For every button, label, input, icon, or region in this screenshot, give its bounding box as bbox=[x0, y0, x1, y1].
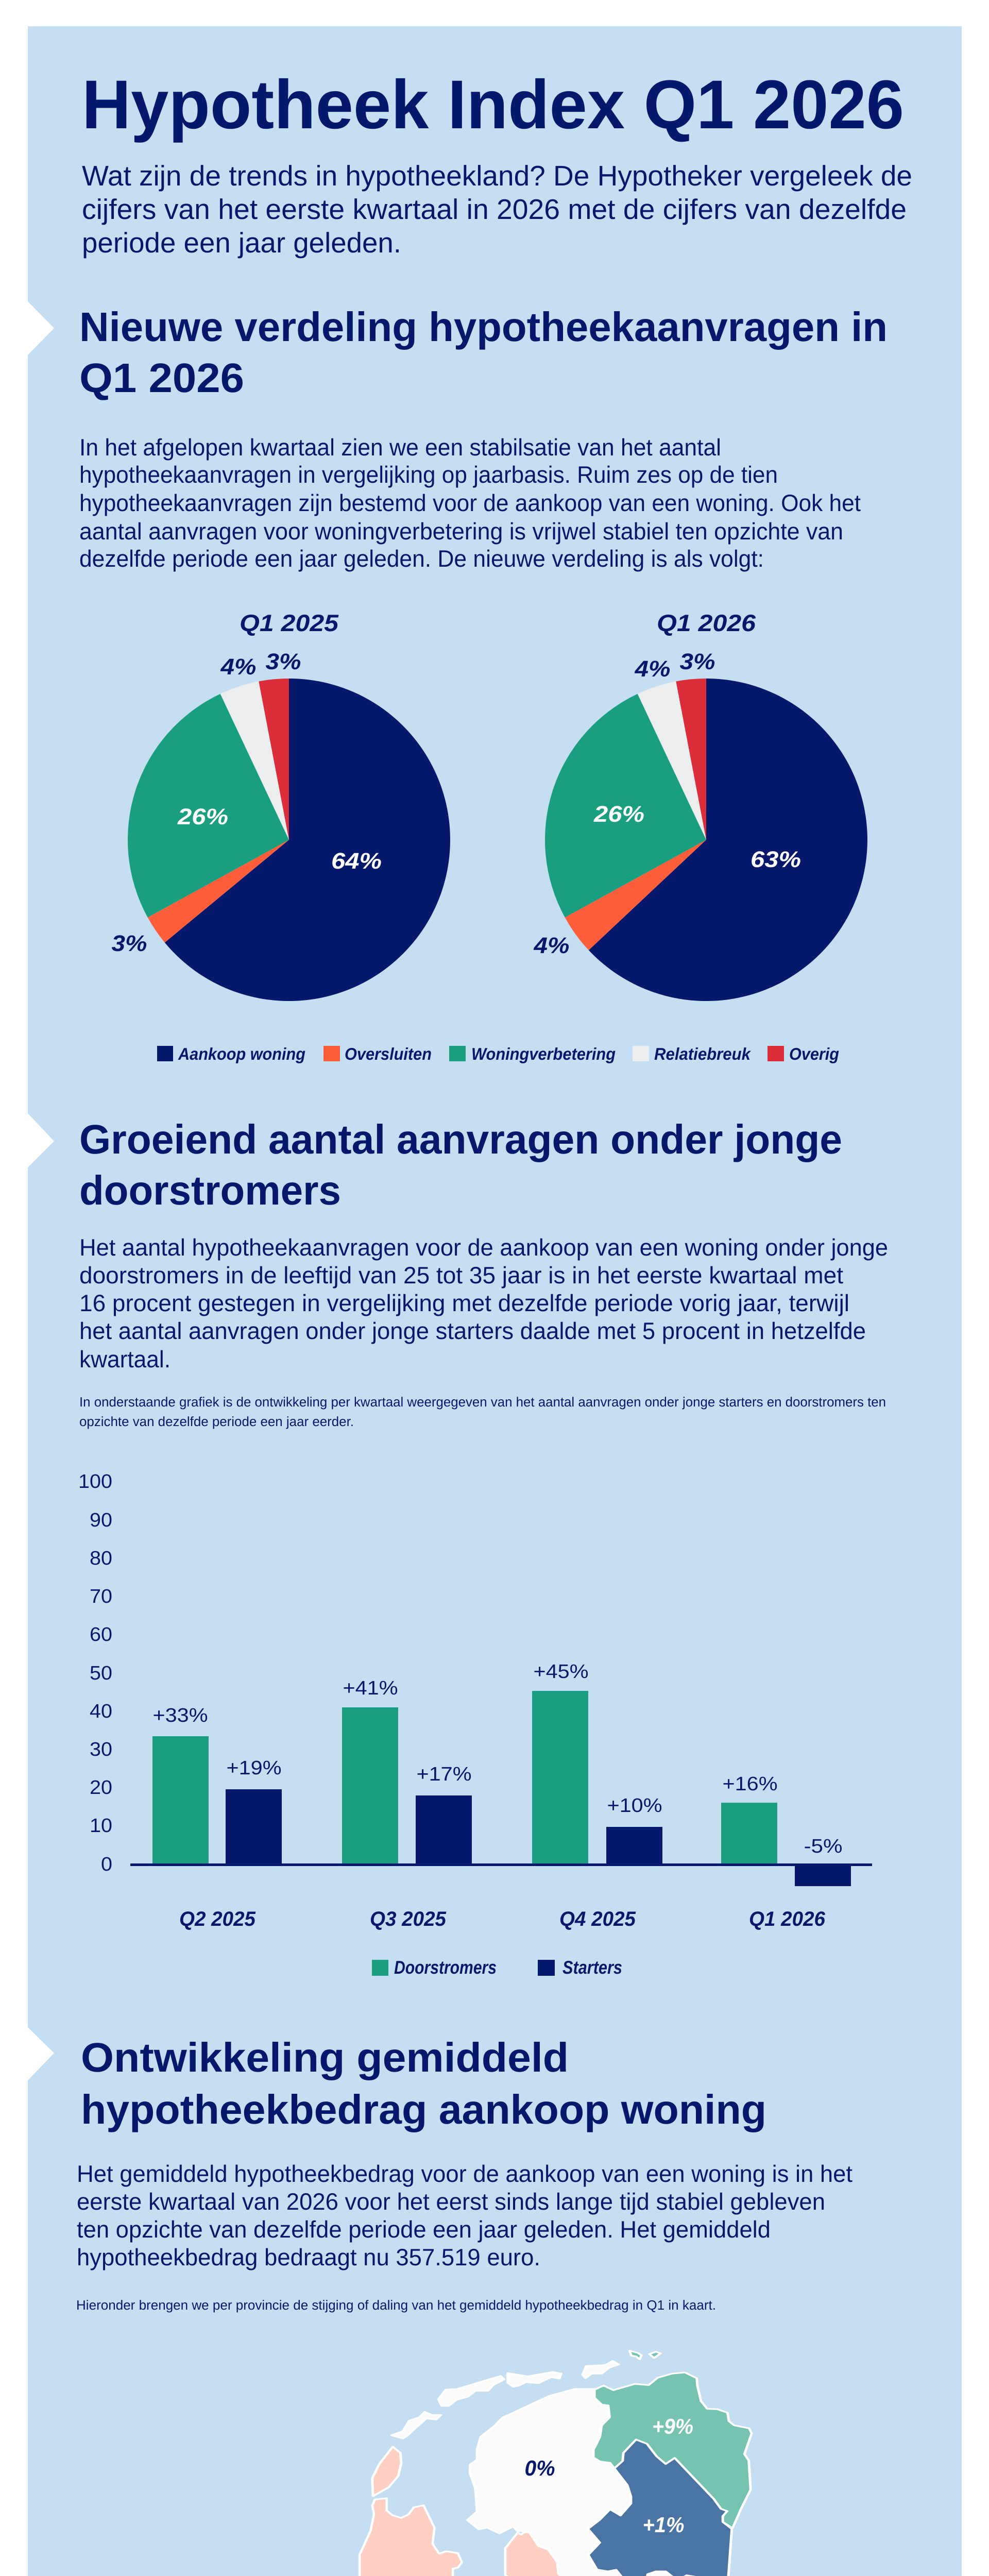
pie chart: Q1 2025: 64% bbox=[331, 849, 382, 874]
pie legend: Relatiebreuk bbox=[654, 1044, 752, 1063]
text block: section 1: In het afgelopen kwartaal zien we een stabilsatie van het aantal bbox=[79, 434, 721, 461]
bars bbox=[130, 1691, 872, 1886]
intro text: Wat zijn de trends in hypotheekland? De Hypotheker vergeleek de bbox=[82, 160, 912, 192]
map value labels: +9% bbox=[652, 2414, 693, 2438]
y axis labels bbox=[78, 1471, 112, 1875]
intro text: periode een jaar geleden. bbox=[82, 227, 401, 259]
bar chart bbox=[78, 1471, 872, 1930]
pie legend: Oversluiten bbox=[345, 1044, 432, 1063]
small note: section 2 bbox=[79, 1394, 886, 1429]
y axis labels: 50 bbox=[90, 1663, 112, 1684]
text block: section 3 bbox=[77, 2160, 852, 2270]
pie chart: Q1 2026: 26% bbox=[593, 802, 644, 827]
bar value labels: -5% bbox=[804, 1836, 843, 1857]
map value labels: 0% bbox=[524, 2456, 555, 2480]
text block: section 1: hypotheekaanvragen in vergelijking op jaarbasis. Ruim zes op de tien bbox=[79, 461, 778, 488]
bar value labels bbox=[152, 1661, 843, 1857]
y axis labels: 10 bbox=[90, 1815, 112, 1837]
text block: section 3: eerste kwartaal van 2026 voor het eerst sinds lange tijd stabiel gebleven bbox=[77, 2188, 825, 2215]
heading: section 3: Ontwikkeling gemiddeld bbox=[81, 2035, 569, 2080]
heading: section 3 bbox=[81, 2035, 766, 2132]
x axis labels: Q3 2025 bbox=[370, 1908, 447, 1930]
text block: section 3: hypotheekbedrag bedraagt nu 357.519 euro. bbox=[77, 2244, 540, 2270]
y axis labels: 100 bbox=[78, 1471, 112, 1493]
x axis labels: Q2 2025 bbox=[179, 1908, 256, 1930]
title: Hypotheek Index Q1 2026 bbox=[82, 66, 904, 143]
pie legend: Aankoop woning bbox=[178, 1044, 305, 1063]
y axis labels: 0 bbox=[101, 1854, 112, 1875]
text block: section 2: Het aantal hypotheekaanvragen voor de aankoop van een woning onder jonge bbox=[79, 1234, 888, 1261]
heading: section 2: doorstromers bbox=[79, 1167, 341, 1213]
pie chart: Q1 2025: 4% bbox=[220, 654, 257, 680]
pie chart: Q1 2025: 3% bbox=[266, 649, 301, 674]
small note: section 2: opzichte van dezelfde periode een jaar eerder. bbox=[79, 1414, 354, 1429]
bar chart legend: Starters bbox=[562, 1957, 622, 1978]
y axis labels: 40 bbox=[90, 1701, 112, 1722]
map of the Netherlands bbox=[158, 2350, 752, 2576]
text block: section 1: dezelfde periode een jaar geleden. De nieuwe verdeling is als volgt: bbox=[79, 545, 764, 572]
pie chart: Q1 2026: 63% bbox=[751, 847, 801, 872]
bar chart legend bbox=[372, 1957, 622, 1978]
text block: section 1: aantal aanvragen voor woningverbetering is vrijwel stabiel ten opzichte van bbox=[79, 518, 843, 545]
y axis labels: 70 bbox=[90, 1586, 112, 1607]
map value labels: +1% bbox=[643, 2513, 684, 2537]
bar value labels: +45% bbox=[534, 1661, 588, 1683]
provinces: middle and south bbox=[279, 2498, 700, 2576]
small note: section 2: In onderstaande grafiek is de ontwikkeling per kwartaal weergegeven van het aantal aanvragen onder jonge starters en doorstromers ten bbox=[79, 1394, 886, 1410]
small note: section 3: Hieronder brengen we per provincie de stijging of daling van het gemiddeld hypotheekbedrag in Q1 in kaart. bbox=[76, 2297, 716, 2313]
heading: section 3: hypotheekbedrag aankoop woning bbox=[81, 2087, 766, 2132]
text block: section 2: 16 procent gestegen in vergelijking met dezelfde periode vorig jaar, terwijl bbox=[79, 1290, 849, 1316]
text block: section 3: ten opzichte van dezelfde periode een jaar geleden. Het gemiddeld bbox=[77, 2216, 771, 2243]
text block: section 2 bbox=[79, 1234, 888, 1372]
x axis labels: Q4 2025 bbox=[559, 1908, 636, 1930]
pie chart: Q1 2026: 4% bbox=[533, 933, 570, 958]
pie chart: Q1 2025 bbox=[111, 609, 450, 1001]
y axis labels: 80 bbox=[90, 1548, 112, 1569]
bar value labels: +16% bbox=[722, 1773, 778, 1795]
bar value labels: +10% bbox=[607, 1795, 662, 1817]
pie chart: Q1 2026: 4% bbox=[634, 656, 671, 682]
intro text: cijfers van het eerste kwartaal in 2026 met de cijfers van dezelfde bbox=[82, 193, 907, 225]
pie legend: Woningverbetering bbox=[471, 1044, 616, 1063]
heading: section 1 bbox=[79, 304, 888, 401]
pie legend: Overig bbox=[789, 1044, 839, 1063]
text block: section 2: doorstromers in de leeftijd van 25 tot 35 jaar is in het eerste kwartaal met bbox=[79, 1262, 843, 1289]
text block: section 1: hypotheekaanvragen zijn bestemd voor de aankoop van een woning. Ook het bbox=[79, 489, 861, 516]
intro text bbox=[82, 160, 912, 259]
pie chart: Q1 2025: 26% bbox=[177, 804, 228, 829]
bar value labels: +17% bbox=[416, 1764, 472, 1785]
y axis labels: 20 bbox=[90, 1777, 112, 1799]
pie chart: Q1 2026: Q1 2026 bbox=[657, 609, 756, 636]
y axis labels: 90 bbox=[90, 1510, 112, 1531]
heading: section 2 bbox=[79, 1116, 842, 1213]
x axis labels: Q1 2026 bbox=[749, 1908, 826, 1930]
pie chart: Q1 2026: 3% bbox=[680, 649, 715, 674]
pie chart: Q1 2026 bbox=[533, 609, 867, 1001]
text block: section 3: Het gemiddeld hypotheekbedrag voor de aankoop van een woning is in het bbox=[77, 2160, 852, 2187]
text block: section 1 bbox=[79, 434, 861, 572]
pie chart: Q1 2025: 3% bbox=[111, 931, 147, 956]
pie legend bbox=[157, 1044, 839, 1063]
heading: section 1: Q1 2026 bbox=[79, 355, 244, 401]
pie chart: Q1 2025: Q1 2025 bbox=[240, 609, 339, 636]
text block: section 2: kwartaal. bbox=[79, 1346, 170, 1372]
text block: section 2: het aantal aanvragen onder jonge starters daalde met 5 procent in hetzelfde bbox=[79, 1317, 866, 1344]
y axis labels: 60 bbox=[90, 1624, 112, 1646]
y axis labels: 30 bbox=[90, 1739, 112, 1760]
bar chart legend: Doorstromers bbox=[394, 1957, 497, 1978]
provinces: north bbox=[372, 2350, 752, 2576]
bar value labels: +33% bbox=[152, 1705, 208, 1726]
heading: section 1: Nieuwe verdeling hypotheekaanvragen in bbox=[79, 304, 888, 350]
heading: section 2: Groeiend aantal aanvragen onder jonge bbox=[79, 1116, 842, 1162]
bar value labels: +19% bbox=[227, 1757, 281, 1779]
map value labels bbox=[200, 2414, 693, 2576]
x axis labels bbox=[179, 1908, 826, 1930]
bar value labels: +41% bbox=[343, 1677, 398, 1699]
